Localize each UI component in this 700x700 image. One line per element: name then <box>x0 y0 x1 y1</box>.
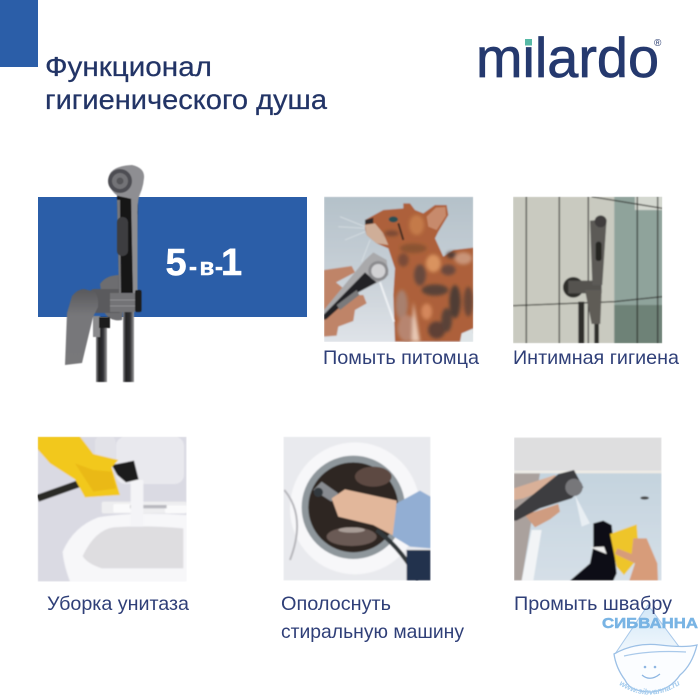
door edge <box>284 490 297 560</box>
caption: Уборка унитаза: Уборка унитаза <box>47 593 189 615</box>
shower head <box>324 252 388 319</box>
valve fittings <box>93 316 100 337</box>
blue panel: 5-в-1 <box>38 197 307 317</box>
shower head <box>514 470 583 521</box>
watermark: Сибванна <box>613 604 698 695</box>
drop <box>615 605 680 654</box>
spray <box>380 282 394 322</box>
lever <box>65 289 98 365</box>
badge text: 5-в-1: - <box>215 254 223 281</box>
sponge <box>610 524 639 575</box>
shower head <box>313 482 338 502</box>
mixer body <box>90 289 122 313</box>
watermark name: СИБВАННА <box>602 615 698 632</box>
hinges <box>102 502 187 513</box>
photo: rinsing the washing machine <box>283 437 431 581</box>
holder <box>110 293 135 312</box>
hands <box>332 489 397 537</box>
wall disc <box>100 275 124 320</box>
water spray <box>575 495 590 527</box>
corner accent block <box>0 0 38 67</box>
title: гигиенического душа <box>45 84 328 115</box>
logo: milardo: ® <box>654 38 662 49</box>
toilet bowl <box>63 514 187 582</box>
cat <box>365 203 473 342</box>
hand <box>615 538 658 581</box>
caption: Интимная гигиена: Интимная гигиена <box>513 347 679 369</box>
photo: washing a pet <box>324 197 473 342</box>
watermark: Сибванна: www.sibvanna.ru <box>620 681 680 695</box>
caption: Помыть питомца: Помыть питомца <box>323 347 479 369</box>
photo: rinsing the mop <box>514 437 662 581</box>
faucet in photo <box>563 215 607 343</box>
hand <box>514 475 560 500</box>
hose <box>38 483 80 498</box>
badge text: 5-в-1: - <box>189 254 197 281</box>
badge text: 5-в-1: 1 <box>221 242 242 284</box>
glove <box>38 437 120 497</box>
shower handle <box>117 192 138 295</box>
coat markings <box>384 215 473 342</box>
title: Функционал <box>45 51 212 82</box>
photo: intimate hygiene <box>513 197 662 343</box>
hand <box>324 266 367 337</box>
bath <box>614 644 697 692</box>
product: hygienic shower and mixer <box>65 165 144 382</box>
photo: toilet cleaning <box>38 437 187 582</box>
caption: Ополоснуть стиральную машину: стиральную машину <box>281 621 464 643</box>
pants <box>407 550 431 581</box>
hoses <box>96 328 107 382</box>
caption: Ополоснуть стиральную машину <box>281 593 464 643</box>
badge text: 5-в-1: в <box>200 254 214 281</box>
caption: Промыть швабру: Промыть швабру <box>514 593 672 615</box>
mop <box>570 521 617 581</box>
shower head <box>112 461 139 482</box>
shirt sleeve <box>393 491 431 548</box>
badge text: 5-в-1: 5 <box>166 242 187 284</box>
hose <box>377 530 418 581</box>
whiskers <box>338 217 370 262</box>
water stream <box>130 480 144 514</box>
logo: milardo: milardo <box>476 26 659 89</box>
caption: Ополоснуть стиральную машину: Ополоснуть <box>281 593 391 615</box>
title <box>45 51 328 115</box>
